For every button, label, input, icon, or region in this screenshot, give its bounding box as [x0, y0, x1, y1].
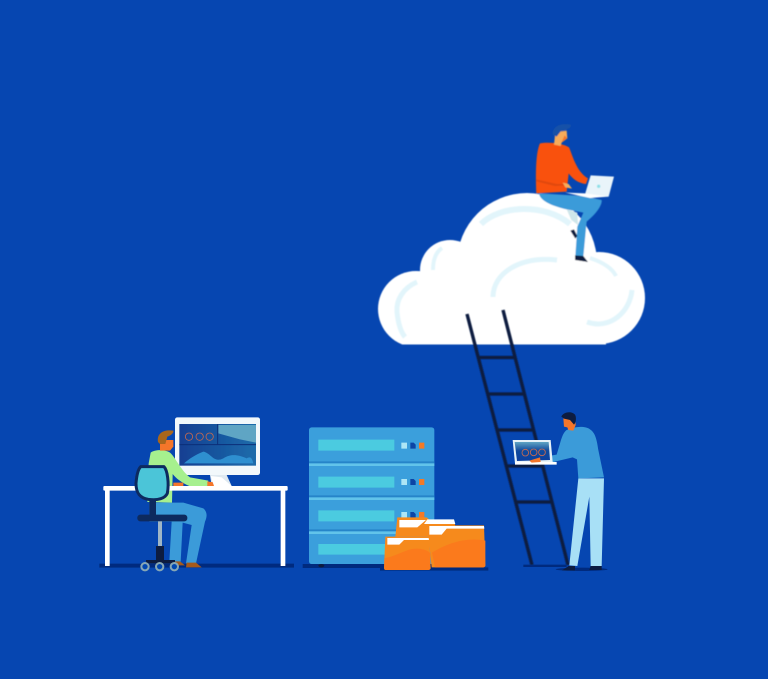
folders — [380, 517, 488, 571]
head — [554, 131, 567, 146]
shadow — [303, 564, 433, 568]
desk — [103, 486, 288, 566]
shirt — [147, 450, 208, 503]
sweater — [540, 427, 604, 478]
shadow — [380, 567, 488, 571]
office chair — [136, 467, 187, 570]
cloud with person on top — [378, 124, 645, 347]
hands — [173, 481, 220, 486]
row dividers — [309, 461, 434, 531]
keyboard — [211, 476, 232, 486]
cabinet — [309, 427, 434, 564]
front folder — [384, 537, 431, 570]
head — [563, 418, 576, 431]
status lights — [401, 443, 407, 518]
sweater — [536, 143, 588, 193]
shoes — [169, 561, 202, 567]
hand — [563, 183, 572, 189]
cloud — [378, 193, 645, 347]
shoes — [562, 566, 602, 570]
ladder — [467, 310, 568, 565]
right folder — [427, 525, 485, 567]
laptop — [513, 440, 553, 463]
laptop — [585, 175, 614, 197]
display bars — [318, 440, 394, 555]
desk with person at computer — [99, 417, 294, 570]
head — [160, 440, 173, 451]
back folder — [395, 517, 457, 537]
trousers — [569, 478, 604, 566]
person sitting on cloud with laptop — [536, 124, 614, 262]
floor shadow — [99, 564, 294, 568]
monitor — [175, 417, 260, 486]
shoes — [570, 229, 588, 262]
trousers — [539, 193, 602, 257]
shadow — [556, 568, 608, 571]
person on ladder with laptop — [513, 412, 608, 571]
trousers — [149, 503, 207, 563]
server rack — [303, 427, 434, 568]
